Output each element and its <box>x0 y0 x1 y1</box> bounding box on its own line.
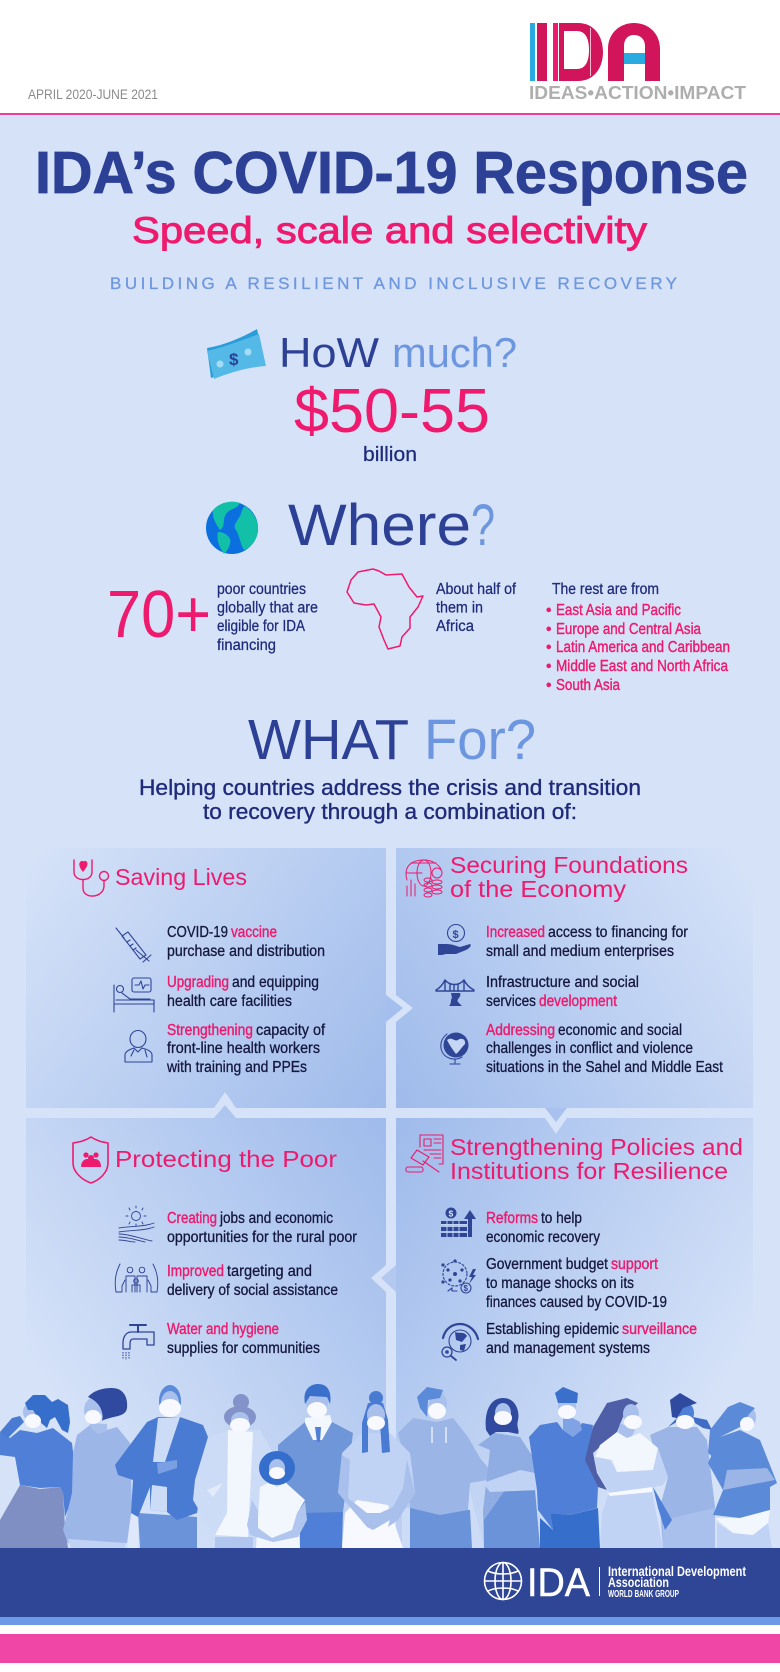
icon: syringe <box>116 928 151 962</box>
icon: surveillance globe <box>442 1324 478 1360</box>
list: other regions: • <box>546 621 551 638</box>
item: epidemic surveillance: and management systems <box>486 1340 650 1357</box>
tagline: BUILDING A RESILIENT AND INCLUSIVE RECOVERY <box>110 274 677 293</box>
heading: where: Where <box>288 493 471 558</box>
item: vaccine: purchase and distribution <box>167 943 325 960</box>
text: about half: Africa <box>436 618 474 635</box>
panel: strengthening policies <box>396 1118 753 1548</box>
panel heading: securing foundations: of the Economy <box>450 876 627 902</box>
person 6 <box>278 1384 353 1548</box>
item: vaccine: COVID-19 <box>167 924 228 941</box>
item: epidemic surveillance: surveillance <box>622 1321 697 1338</box>
item: social assistance <box>167 1263 338 1299</box>
arrow: up <box>214 1092 236 1118</box>
item: conflict situations: economic and social <box>558 1022 682 1039</box>
footer logo: International Development Association: Association <box>608 1574 669 1590</box>
list: other regions: The rest are from <box>552 581 659 598</box>
list: other regions: East Asia and Pacific <box>556 602 681 619</box>
panel: securing foundations <box>396 848 753 1108</box>
item: water: supplies for communities <box>167 1340 320 1357</box>
icon: economy globe and coins <box>406 860 442 897</box>
icon: doctor <box>125 1030 152 1062</box>
list: other regions: • <box>546 602 551 619</box>
item: social assistance: delivery of social assistance <box>167 1282 338 1299</box>
person 11 <box>585 1398 668 1548</box>
item: budget support: Government budget <box>486 1256 609 1273</box>
icon: world bank globe <box>484 1562 522 1600</box>
person 8 <box>398 1387 490 1548</box>
item: budget support: support <box>611 1256 659 1273</box>
heading: how much <box>279 329 517 376</box>
footer logo: International Development Association <box>484 1561 746 1605</box>
item: infrastructure: development <box>539 993 618 1010</box>
icon: bricks and arrow <box>441 1208 476 1237</box>
icon: gavel and document <box>406 1135 443 1172</box>
item: water <box>167 1321 320 1357</box>
icon: globe <box>206 502 258 554</box>
intro text <box>139 775 641 824</box>
footer logo: International Development Association: International Development <box>608 1563 746 1579</box>
icon: banknotes <box>207 329 266 379</box>
item: vaccine <box>167 924 325 960</box>
title: IDA’s COVID-19 Response <box>35 140 748 206</box>
icon: virus and money <box>441 1259 476 1293</box>
list: other regions: South Asia <box>556 677 620 694</box>
icon: sun and fields <box>119 1206 154 1242</box>
heading: how much: much? <box>392 329 517 376</box>
person 12 <box>650 1393 715 1548</box>
list: other regions: • <box>546 677 551 694</box>
heading: where: ? <box>471 493 495 558</box>
text: poor countries: eligible for IDA <box>217 618 306 635</box>
person 13 <box>708 1402 777 1548</box>
item: rural jobs <box>167 1210 357 1246</box>
panel heading: securing foundations <box>450 852 688 902</box>
item: budget support: to manage shocks on its <box>486 1275 634 1292</box>
item: rural jobs: opportunities for the rural poor <box>167 1229 357 1246</box>
panel heading: securing foundations: Securing Foundations <box>450 852 688 878</box>
panel: protecting the poor <box>26 1118 386 1548</box>
item: conflict situations: Addressing <box>486 1022 555 1039</box>
icon: shield with people <box>73 1137 108 1183</box>
item: water: Water and hygiene <box>167 1321 279 1338</box>
icon: water tap <box>123 1325 154 1360</box>
icon: stethoscope <box>74 860 108 896</box>
heading: what for <box>248 708 536 772</box>
person 4 <box>193 1394 275 1548</box>
list: other regions: Middle East and North Africa <box>556 658 728 675</box>
text: poor countries <box>217 581 318 654</box>
item: health workers: with training and PPEs <box>166 1059 307 1076</box>
text: about half: About half of <box>436 581 517 598</box>
panel heading: saving lives: Saving Lives <box>115 864 247 890</box>
item: conflict situations: challenges in conflict and violence <box>486 1040 693 1057</box>
IDA logo: ideas action impact <box>529 23 746 103</box>
text: about half <box>436 581 517 635</box>
item: budget support: finances caused by COVID-19 <box>486 1294 667 1311</box>
panel heading: strengthening policies: Strengthening Policies and <box>450 1134 743 1160</box>
icon: family in hands <box>115 1264 158 1292</box>
arrow: left <box>371 1265 396 1292</box>
vertical and horizontal gaps between panels <box>26 848 753 1548</box>
illustration: masked people <box>0 1384 777 1548</box>
item: health care: and equipping <box>232 974 319 991</box>
stat: 70+: 70+ <box>107 577 211 652</box>
person 10 <box>529 1387 600 1548</box>
heading: what for: For? <box>424 708 536 772</box>
footer banner <box>0 1548 780 1617</box>
panel heading: strengthening policies: Institutions for Resilience <box>450 1158 728 1184</box>
arrow: right <box>386 995 413 1022</box>
item: reforms: economic recovery <box>486 1229 600 1246</box>
footer pink band <box>0 1634 780 1663</box>
intro text: Helping countries address the crisis and transition <box>139 775 641 800</box>
item: financing: access to financing for <box>548 924 688 941</box>
person 1 <box>0 1395 77 1548</box>
item: health care: health care facilities <box>167 993 292 1010</box>
icon: hand with coin: $ <box>452 929 459 941</box>
person 7 <box>338 1391 415 1548</box>
item: health care <box>167 974 319 1010</box>
panel heading: protecting the poor: Protecting the Poor <box>115 1146 337 1172</box>
list: other regions: • <box>546 639 551 656</box>
list: other regions <box>546 581 730 694</box>
arrow: down <box>545 1108 567 1134</box>
item: social assistance: Improved <box>167 1263 224 1280</box>
item: financing: small and medium enterprises <box>486 943 674 960</box>
person 2 <box>63 1388 138 1548</box>
item: conflict situations <box>486 1022 724 1076</box>
heading: how much: HoW <box>279 329 379 376</box>
footer logo: International Development Association: WORLD BANK GROUP <box>608 1589 679 1600</box>
text: poor countries: poor countries <box>217 581 306 598</box>
text: poor countries: globally that are <box>217 600 318 616</box>
panel heading: strengthening policies <box>450 1134 743 1184</box>
item: budget support <box>486 1256 667 1311</box>
amount unit: billion <box>363 444 417 466</box>
date label: APRIL 2020-JUNE 2021 <box>28 87 158 102</box>
text: about half: them in <box>436 600 483 616</box>
heading: what for: WHAT <box>248 708 409 772</box>
item: rural jobs: Creating <box>167 1210 217 1227</box>
item: health workers <box>166 1022 326 1076</box>
item: reforms: to help <box>541 1210 582 1227</box>
icon: Africa map <box>347 569 423 649</box>
item: epidemic surveillance <box>486 1321 697 1357</box>
item: infrastructure <box>486 974 639 1010</box>
item: infrastructure: services <box>486 993 536 1010</box>
item: health workers: capacity of <box>256 1022 326 1039</box>
list: other regions: Europe and Central Asia <box>556 621 701 638</box>
item: infrastructure: Infrastructure and social <box>486 974 639 991</box>
icon: hand with coin <box>438 924 471 955</box>
item: financing: Increased <box>486 924 545 941</box>
person 9 <box>478 1398 545 1548</box>
panel: saving lives <box>26 848 386 1108</box>
intro text: to recovery through a combination of: <box>203 799 577 824</box>
item: health care: Upgrading <box>167 974 229 991</box>
list: other regions: Latin America and Caribbean <box>556 639 730 656</box>
amount: $50-55 <box>294 377 490 446</box>
footer logo: International Development Association: IDA <box>527 1561 590 1605</box>
icon: bridge and road <box>436 980 474 1006</box>
item: conflict situations: situations in the Sahel and Middle East <box>486 1059 724 1076</box>
icon: virus and money: $ <box>464 1284 468 1293</box>
item: financing <box>486 924 688 960</box>
list: other regions: • <box>546 658 551 675</box>
footer light band <box>0 1617 780 1625</box>
item: social assistance: targeting and <box>227 1263 312 1280</box>
item: rural jobs: jobs and economic <box>219 1210 333 1227</box>
icon: hospital bed <box>114 978 154 1012</box>
text: poor countries: financing <box>217 637 276 654</box>
icon: desk globe <box>441 1032 468 1064</box>
item: health workers: front-line health workers <box>167 1040 320 1057</box>
item: reforms: Reforms <box>486 1210 538 1227</box>
icon: banknotes: $ <box>229 350 239 369</box>
icon: bricks and arrow: $ <box>448 1208 454 1218</box>
item: vaccine: vaccine <box>231 924 277 941</box>
subtitle: Speed, scale and selectivity <box>132 210 648 251</box>
item: reforms <box>486 1210 600 1246</box>
person 3 <box>115 1385 208 1548</box>
item: health workers: Strengthening <box>167 1022 253 1039</box>
person 5 <box>247 1451 307 1548</box>
item: epidemic surveillance: Establishing epidemic <box>486 1321 619 1338</box>
IDA logo: ideas action impact: IDEAS•ACTION•IMPACT <box>529 83 746 103</box>
